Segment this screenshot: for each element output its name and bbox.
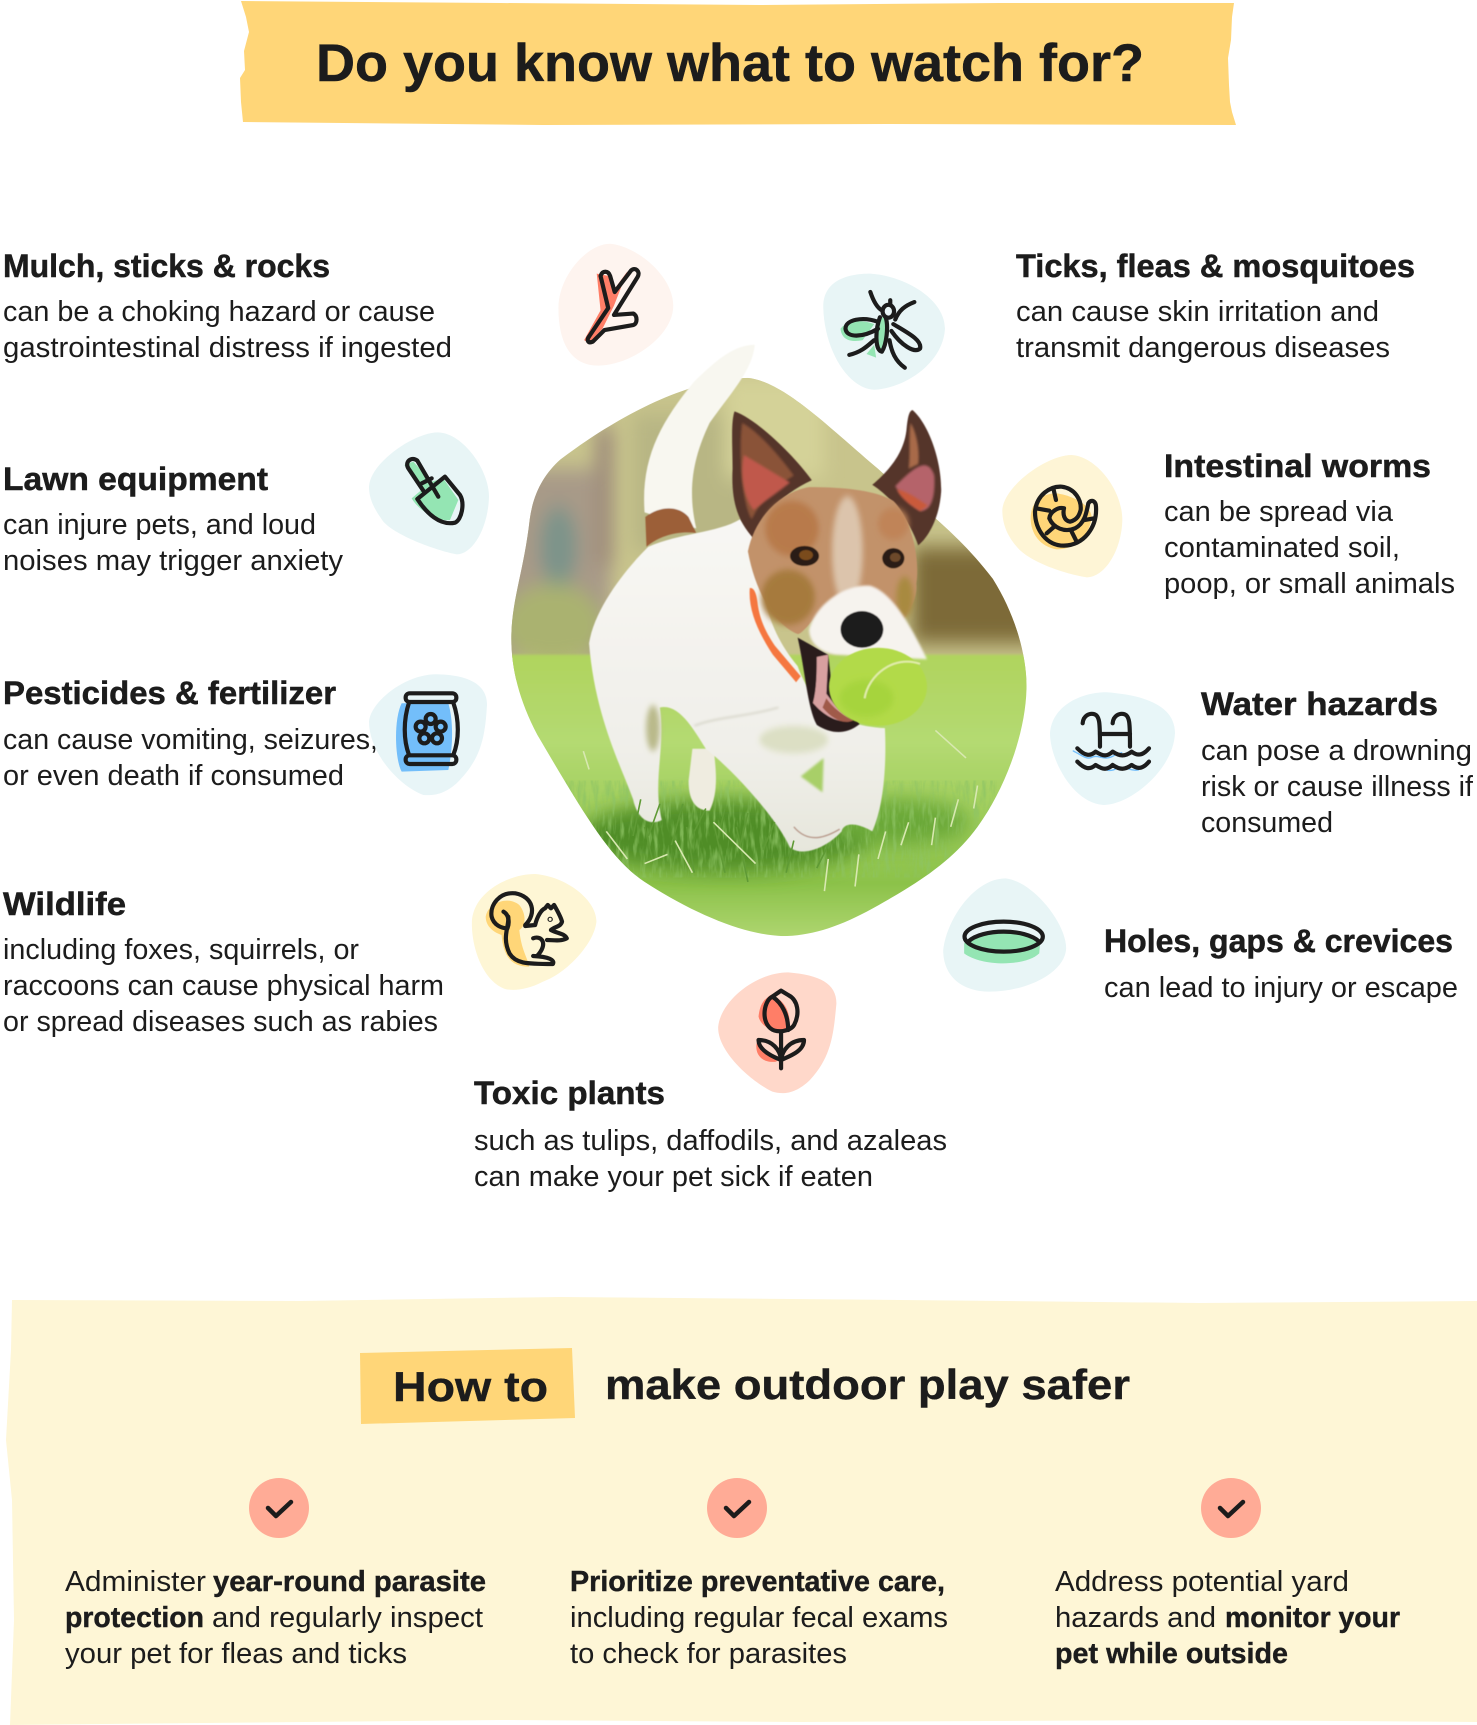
tip 1: Administer — [65, 1566, 206, 1598]
item: wildlife — [3, 886, 444, 1038]
item: ticks, fleas and mosquitoes: can cause skin irritation and — [1016, 296, 1379, 328]
dog eyes — [790, 546, 904, 568]
item: intestinal worms: can be spread via — [1164, 496, 1394, 528]
item: intestinal worms: poop, or small animals — [1164, 568, 1455, 600]
icon: squirrel — [472, 874, 596, 990]
item: toxic plants — [474, 1075, 947, 1193]
tip 2: including regular fecal exams — [570, 1602, 948, 1634]
item: mulch, sticks and rocks: gastrointestinal distress if ingested — [3, 332, 452, 364]
item: mulch, sticks and rocks: can be a choking hazard or cause — [3, 296, 435, 328]
dog left ear — [732, 411, 812, 539]
item: holes, gaps and crevices — [1104, 923, 1458, 1004]
tip 1: year-round parasite — [213, 1566, 486, 1598]
dog nose — [841, 611, 883, 648]
item: lawn equipment — [3, 461, 343, 577]
dog head — [748, 487, 927, 732]
icon: tulip — [718, 972, 836, 1093]
item: holes, gaps and crevices: can lead to injury or escape — [1104, 972, 1458, 1004]
item: mulch, sticks and rocks: Mulch, sticks & rocks — [3, 248, 330, 284]
tennis ball — [829, 648, 927, 726]
item: lawn equipment: can injure pets, and loud — [3, 509, 316, 541]
item: toxic plants: such as tulips, daffodils, and azaleas — [474, 1125, 947, 1157]
central dog photo — [495, 345, 1039, 948]
grass blades over paws — [583, 730, 978, 891]
tip 2 — [570, 1478, 948, 1670]
item: intestinal worms — [1164, 448, 1455, 600]
tip 1: your pet for fleas and ticks — [65, 1638, 407, 1670]
tip 2: to check for parasites — [570, 1638, 847, 1670]
item: water hazards — [1201, 686, 1474, 839]
item: ticks, fleas and mosquitoes: Ticks, fleas & mosquitoes — [1016, 248, 1415, 284]
how to tag: How to — [393, 1363, 548, 1410]
panel: how to make outdoor play safer — [6, 1297, 1477, 1725]
icon: fertilizer bag — [369, 674, 487, 795]
tip 3: hazards and — [1055, 1602, 1216, 1634]
check icon — [249, 1478, 309, 1538]
how to tag — [360, 1348, 575, 1424]
dog mouth — [798, 638, 860, 732]
icon: mosquito — [823, 274, 945, 390]
item: mulch, sticks and rocks — [3, 248, 452, 364]
icon: pool ladder — [1050, 692, 1175, 805]
tip 3 — [1055, 1478, 1400, 1670]
item: lawn equipment: Lawn equipment — [3, 461, 268, 497]
item: holes, gaps and crevices: Holes, gaps & crevices — [1104, 923, 1453, 959]
tip 3: pet while outside — [1055, 1638, 1288, 1670]
item: wildlife: raccoons can cause physical harm — [3, 970, 444, 1002]
item: wildlife: Wildlife — [3, 886, 126, 922]
item: pesticides and fertilizer: or even death if consumed — [3, 760, 344, 792]
item: ticks, fleas and mosquitoes: transmit dangerous diseases — [1016, 332, 1390, 364]
item: lawn equipment: noises may trigger anxiety — [3, 545, 343, 577]
item: toxic plants: can make your pet sick if eaten — [474, 1161, 873, 1193]
dog collar — [750, 588, 801, 682]
title banner — [240, 1, 1236, 125]
tip 3: Address potential yard — [1055, 1566, 1349, 1598]
panel heading: make outdoor play safer — [605, 1361, 1130, 1408]
item: pesticides and fertilizer: can cause vomiting, seizures, — [3, 724, 378, 756]
item: wildlife: including foxes, squirrels, or — [3, 934, 359, 966]
tip 1: and regularly inspect — [212, 1602, 483, 1634]
grass — [503, 655, 1039, 948]
item: water hazards: consumed — [1201, 807, 1333, 839]
item: wildlife: or spread diseases such as rabies — [3, 1006, 438, 1038]
dog tail — [644, 345, 755, 547]
item: water hazards: risk or cause illness if — [1201, 771, 1474, 803]
item: water hazards: can pose a drowning — [1201, 735, 1472, 767]
tip 3: monitor your — [1225, 1602, 1400, 1634]
tip 2: Prioritize preventative care, — [570, 1566, 945, 1598]
item: pesticides and fertilizer — [3, 675, 378, 792]
check icon — [1201, 1478, 1261, 1538]
dog body — [589, 519, 885, 852]
icon: hole — [943, 878, 1066, 992]
tip 1: protection — [65, 1602, 204, 1634]
title text: Do you know what to watch for? — [316, 34, 1144, 93]
tip 1 — [65, 1478, 486, 1670]
item: ticks, fleas and mosquitoes — [1016, 248, 1415, 364]
icon: stick — [558, 244, 673, 366]
item: intestinal worms: contaminated soil, — [1164, 532, 1400, 564]
item: intestinal worms: Intestinal worms — [1164, 448, 1431, 484]
item: pesticides and fertilizer: Pesticides & fertilizer — [3, 675, 336, 711]
dog right ear — [872, 410, 941, 545]
item: water hazards: Water hazards — [1201, 686, 1438, 722]
check icon — [707, 1478, 767, 1538]
item: toxic plants: Toxic plants — [474, 1075, 665, 1111]
icon: trowel — [369, 432, 489, 554]
icon: worm — [1002, 455, 1122, 577]
photo background — [495, 368, 1039, 948]
